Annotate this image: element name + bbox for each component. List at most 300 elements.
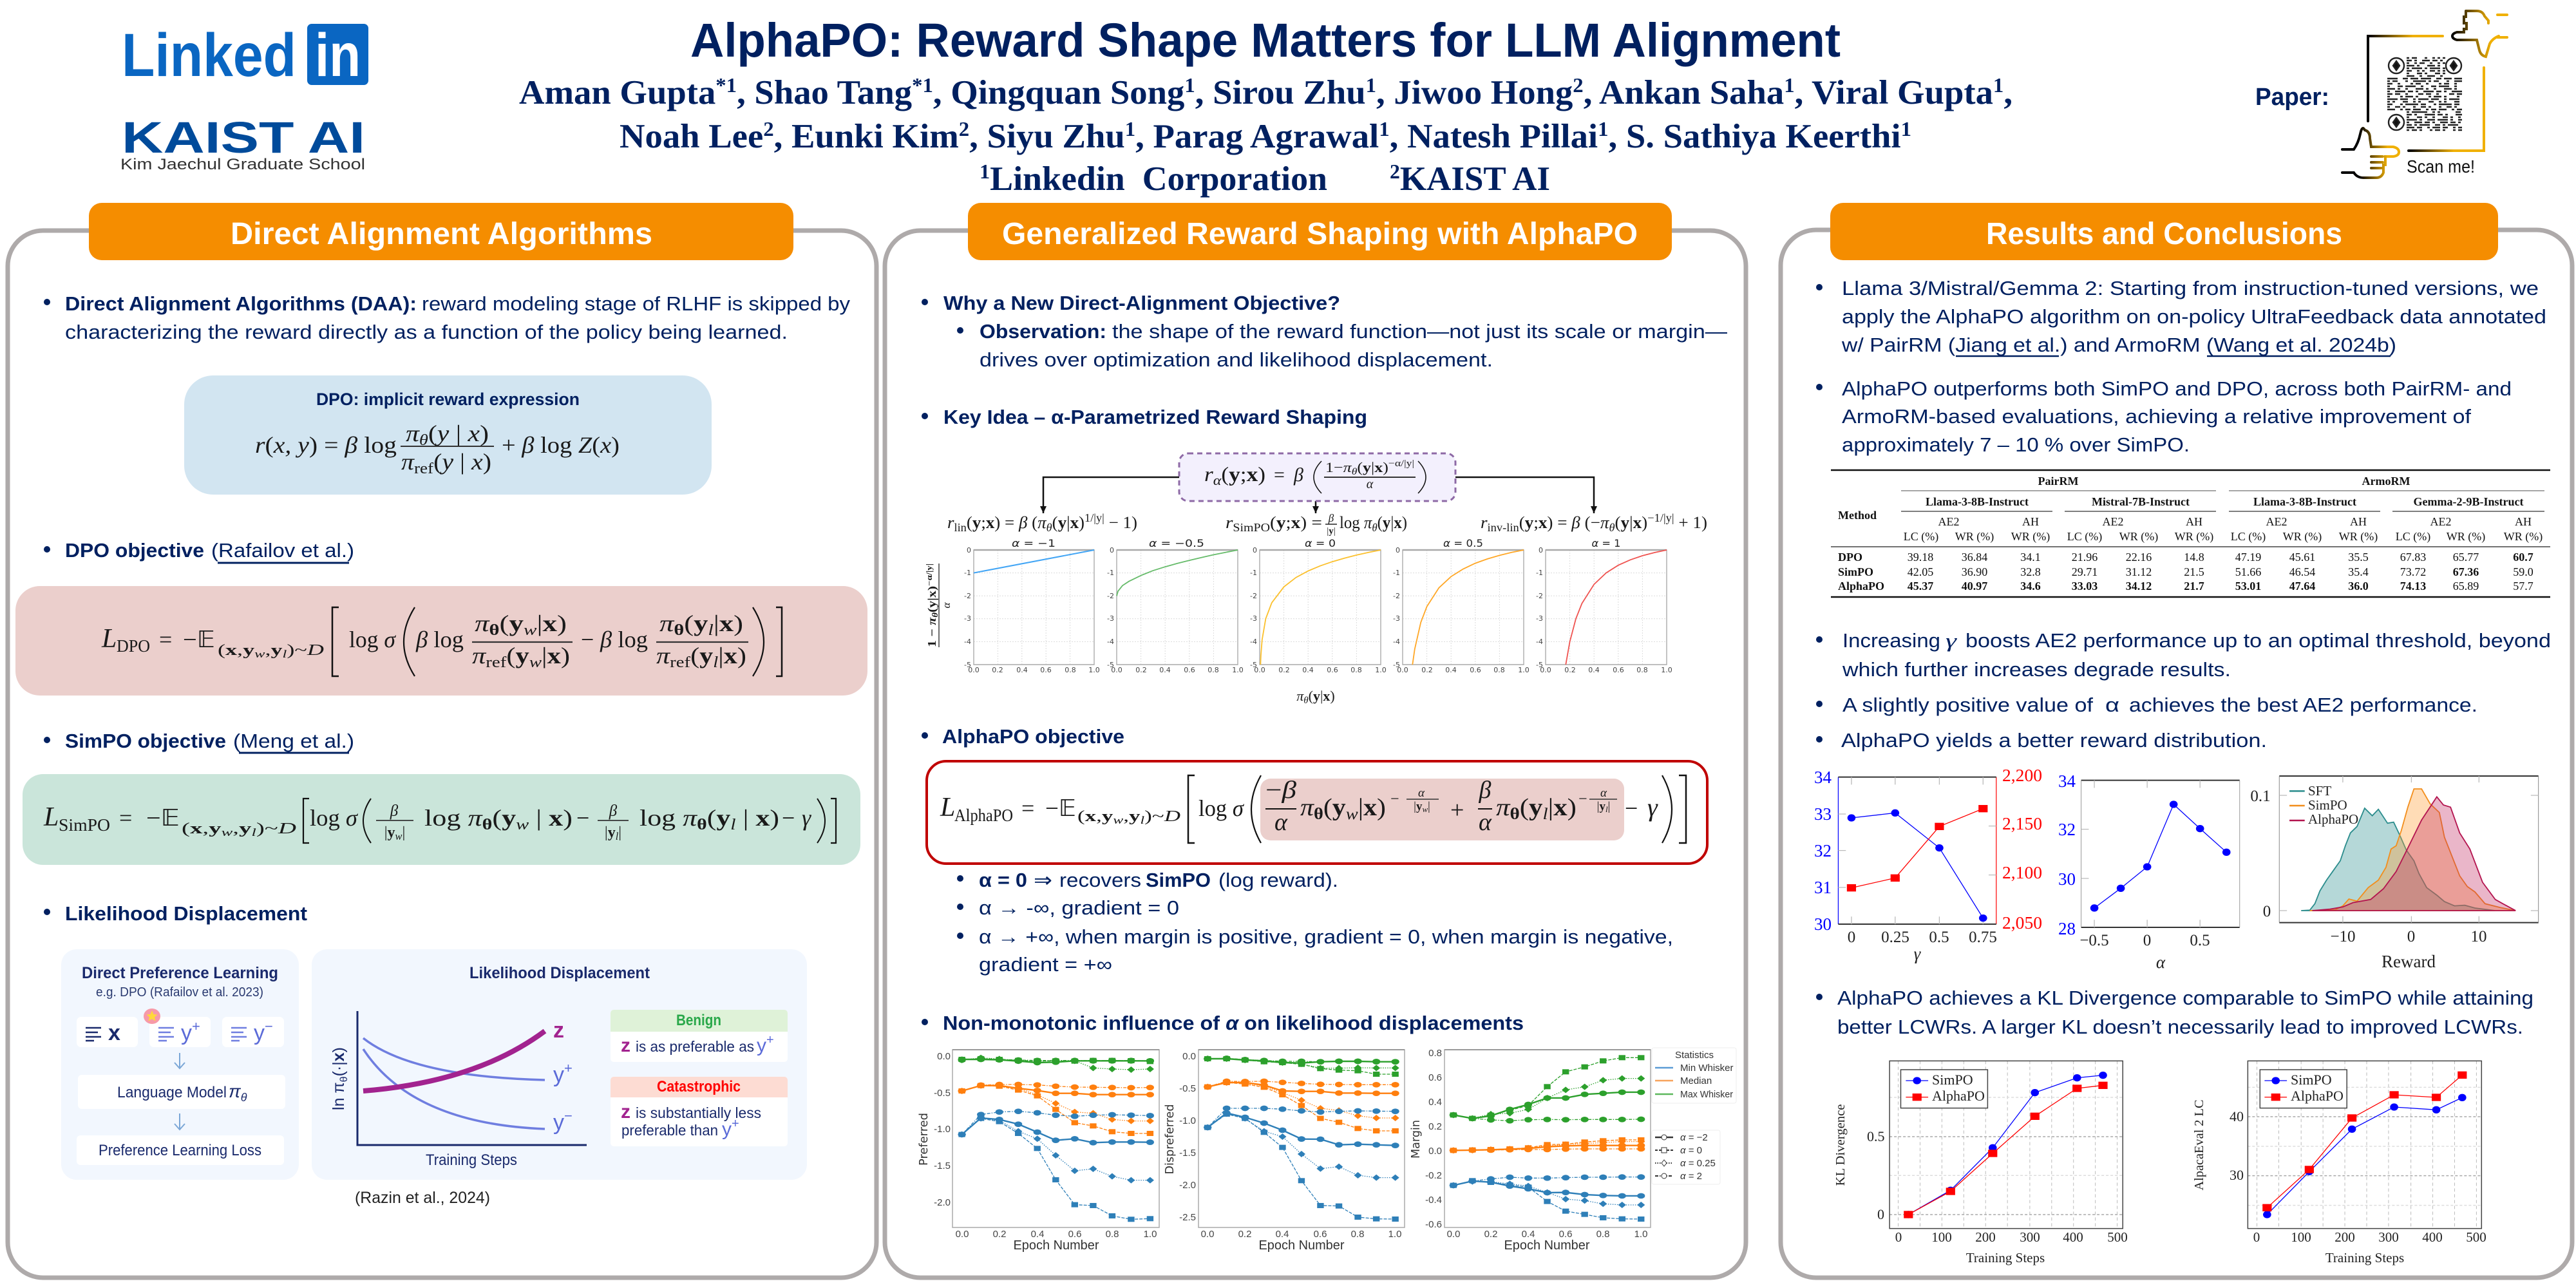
formula: r SimPO: y;x) = [1276, 513, 1320, 532]
panel heading [89, 203, 793, 260]
small plot: alpha 0: -5 [1250, 661, 1257, 669]
chart: KL divergence: Training Steps [1966, 1250, 2045, 1265]
chart: margin: 0.8 [1596, 1229, 1609, 1240]
results table: 31.12 [2126, 565, 2152, 578]
small plot: alpha 1: -1 [1536, 569, 1543, 577]
chart: KL divergence: 0.5 [1867, 1128, 1884, 1144]
formula: AlphaPO loss: π [1300, 794, 1314, 821]
formula: r lin: lin [954, 521, 967, 534]
formula: AlphaPO loss: + [1450, 797, 1464, 824]
chart: AlpacaEval 2 LC: 30 [2230, 1167, 2244, 1183]
results table: 60.7 [2513, 551, 2533, 564]
small plot: alpha 0: -3 [1250, 614, 1257, 623]
small plot: alpha 0.5: -2 [1393, 592, 1400, 600]
chart: gamma sweep: 2,200 [2002, 766, 2042, 785]
text: gamma and alpha findings: γ [1946, 630, 1957, 652]
box: language model: θ [241, 1091, 247, 1104]
formula: r inv-lin: inv-lin [1488, 521, 1519, 534]
y axis label: ( [925, 608, 939, 612]
authors: , Parag Agrawal [1135, 118, 1379, 155]
text: AlphaPO outperforms: approximately 7 – 10 % over SimPO. [1842, 434, 2190, 456]
formula: DPO loss: y [516, 643, 529, 668]
text: why a new objective: Why a New Direct-Alignment Objective? [943, 292, 1340, 314]
chart: reward distribution: Reward [2382, 952, 2436, 971]
formula: alpha reward: = [1274, 464, 1285, 486]
logo: KAIST AI: KAIST AI [122, 113, 365, 162]
formula: DPO loss: DPO [117, 636, 150, 656]
results table: 74.13 [2400, 580, 2426, 592]
formula: AlphaPO loss: − [1625, 795, 1638, 821]
affiliations: Linkedin Corporation [990, 160, 1327, 198]
small plot: alpha 0: 1.0 [1375, 666, 1387, 674]
small plot: alpha -1: -3 [964, 614, 971, 623]
small plot: alpha 1: 1.0 [1661, 666, 1672, 674]
chart: margin: 0.0 [1447, 1229, 1460, 1240]
legend: statistics: Statistics [1675, 1050, 1714, 1061]
x axis label: ( [1309, 688, 1313, 704]
chart: preferred: -2.0 [934, 1197, 951, 1208]
chart: alpha sweep: 32 [2058, 820, 2076, 839]
callout: DPO implicit reward expression: y | x) [437, 421, 488, 446]
chart: margin: -0.4 [1425, 1195, 1442, 1206]
text: AlphaPO outperforms: ArmoRM-based evaluations, achieving a relative improvement of [1842, 406, 2472, 428]
chart: gamma sweep: 33 [1814, 804, 1832, 824]
results table: 59.0 [2513, 565, 2533, 578]
small plot: alpha 0.5: 0.6 [1470, 666, 1481, 674]
small plot: alpha 1: α = 1 [1592, 537, 1620, 549]
formula: DPO loss: l [708, 621, 714, 639]
chart: dispreferred: Dispreferred [1163, 1104, 1177, 1175]
formula: AlphaPO loss: ( [1520, 794, 1529, 821]
text: gamma and alpha findings [1816, 630, 2551, 752]
formula: SimPO loss: | [529, 805, 549, 831]
formula: DPO loss: w [254, 648, 265, 660]
results table: 67.36 [2453, 565, 2479, 578]
text: gamma and alpha findings: Increasing [1842, 630, 1940, 652]
formula: DPO loss: − [581, 627, 594, 652]
formula: SimPO loss: θ [697, 816, 707, 833]
formula: SimPO loss: w [395, 830, 402, 842]
logo: KAIST AI [120, 113, 365, 173]
arrow down [175, 1113, 185, 1130]
formula: AlphaPO loss: π [1496, 794, 1511, 821]
results table: LC (%) [2231, 530, 2266, 544]
results table: 33.03 [2072, 580, 2098, 592]
formula: r lin: − 1) [1104, 513, 1137, 532]
formula: DPO loss: w [529, 654, 542, 671]
authors: *1 [715, 74, 737, 97]
formula: AlphaPO loss: θ [1510, 804, 1520, 823]
results table: LC (%) [2396, 530, 2430, 544]
results table: 36.90 [1962, 565, 1987, 578]
small plot: alpha -0.5: 0.4 [1159, 666, 1171, 674]
authors: 1 [1184, 74, 1195, 97]
formula: SimPO loss: θ [482, 816, 492, 833]
small plot: alpha 0.5: 0.4 [1445, 666, 1457, 674]
results table: AE2 [2266, 515, 2287, 528]
formula: DPO loss: l [283, 648, 287, 660]
diagram: likelihood displacement chart: Training Steps [426, 1151, 517, 1169]
results table: 39.18 [1908, 551, 1933, 564]
text: AlphaPO outperforms: AlphaPO outperforms both SimPO and DPO, across both PairRM- and [1842, 378, 2512, 400]
chart: reward distribution: 0 [2263, 903, 2271, 920]
card: benign [611, 1010, 788, 1062]
formula: SimPO loss: log π [424, 805, 480, 831]
results table: 21.96 [2072, 551, 2098, 564]
authors: 2 [763, 118, 774, 140]
formula: DPO loss: π [656, 643, 670, 668]
logo: LinkedIn: Linked [122, 21, 296, 90]
chart: dispreferred: 0.0 [1182, 1051, 1196, 1062]
formula: SimPO loss: | [736, 805, 755, 831]
formula: r SimPO: y|x) [1383, 513, 1407, 532]
chart: margin: 0.4 [1428, 1097, 1442, 1108]
formula: r inv-lin: + 1) [1674, 513, 1707, 532]
small plot: alpha -0.5: 0.8 [1208, 666, 1219, 674]
formula: AlphaPO loss: l [1605, 804, 1608, 814]
x axis label: y|x) [1313, 688, 1335, 704]
results table: 51.66 [2235, 565, 2261, 578]
results table: AH [2515, 515, 2532, 528]
formula: AlphaPO loss: | [1548, 794, 1553, 821]
legend: alpha values: α = −2 [1680, 1132, 1708, 1143]
authors: , Siyu Zhu [969, 118, 1125, 155]
formula: AlphaPO loss: |y [1414, 800, 1422, 813]
formula: AlphaPO loss: α [1418, 786, 1425, 800]
text: why a new objective: the shape of the reward function—not just its scale or margin— [1112, 321, 1728, 343]
formula: SimPO loss: | [618, 824, 621, 841]
chart: AlpacaEval 2 LC: 200 [2334, 1229, 2355, 1245]
chart: AlpacaEval 2 LC: 500 [2466, 1229, 2486, 1245]
small plot: alpha 0: 0.6 [1327, 666, 1338, 674]
results table: LC (%) [2067, 530, 2102, 544]
formula: r lin: ( [1052, 513, 1058, 532]
formula: DPO loss: l [713, 654, 719, 671]
text: gamma and alpha findings: AlphaPO yields a better reward distribution. [1841, 730, 2267, 752]
formula: DPO loss: −𝔼 [183, 627, 215, 652]
authors: , S. Sathiya Keerthi [1609, 118, 1901, 155]
chart: margin: Margin [1409, 1120, 1423, 1159]
legend: alpha values: α = 0.25 [1680, 1158, 1716, 1169]
y axis label: −α/|y| [925, 564, 934, 586]
formula: AlphaPO loss: α [1479, 809, 1492, 836]
chart: dispreferred: Epoch Number [1258, 1238, 1345, 1253]
formula: r SimPO: ( [1270, 513, 1276, 532]
chart: dispreferred: 0.6 [1314, 1229, 1327, 1240]
chart: KL divergence: 200 [1975, 1229, 1996, 1245]
chart: preferred: 0.0 [937, 1051, 951, 1062]
formula: AlphaPO loss: α [1600, 786, 1607, 800]
chart: gamma sweep: 2,150 [2002, 814, 2042, 833]
formula: SimPO loss: x) [549, 805, 571, 831]
formula: alpha reward: −α/|y| [1388, 459, 1414, 469]
diagram: likelihood displacement chart: Likelihood Displacement [469, 964, 650, 982]
chart: gamma sweep: 34 [1814, 768, 1832, 787]
formula: r SimPO [1226, 512, 1407, 536]
chart: AlpacaEval 2 LC: SimPO [2291, 1072, 2332, 1088]
formula: DPO loss: D [306, 642, 324, 659]
results table: AH [2186, 515, 2202, 528]
formula: SimPO loss: (x ,y [182, 820, 216, 837]
small plot: alpha -0.5: 0.6 [1184, 666, 1195, 674]
formula: SimPO loss: − [782, 805, 795, 831]
chart: gamma sweep: 30 [1814, 914, 1832, 934]
formula: SimPO loss: ( [707, 805, 716, 831]
QR code with scan-me frame [2342, 11, 2507, 178]
formula: r inv-lin: ( [1519, 513, 1525, 532]
heading: SimPO objective: (Meng et al.) [233, 730, 354, 752]
formula: SimPO loss: l [730, 816, 736, 833]
box: language model: Language Model [117, 1084, 227, 1101]
formula: AlphaPO loss: θ [1314, 804, 1323, 823]
small plot: alpha 1: 0.8 [1636, 666, 1648, 674]
small plot: alpha -0.5: -3 [1107, 614, 1114, 623]
formula: alpha reward: ( [1357, 459, 1363, 475]
results table: 67.83 [2400, 551, 2426, 564]
formula: AlphaPO loss: w [1113, 814, 1123, 826]
formula: SimPO loss: y [502, 805, 516, 831]
chart: alpha sweep: 28 [2058, 919, 2076, 938]
card: benign: Benign [676, 1012, 721, 1029]
chart: dispreferred [1163, 1050, 1405, 1253]
formula: AlphaPO loss: ( [1323, 794, 1332, 821]
results table: WR (%) [2339, 530, 2378, 544]
card: catastrophic: is substantially less [636, 1104, 761, 1121]
formula: AlphaPO loss: = [1021, 795, 1034, 821]
text: gamma and alpha findings: A slightly positive value of [1842, 694, 2094, 716]
box: preference learning loss [77, 1135, 284, 1165]
results table: 34.6 [2020, 580, 2041, 592]
results table: AE2 [1938, 515, 1959, 528]
formula: DPO loss: y [699, 643, 713, 668]
text: gamma and alpha findings: which further increases degrade results. [1842, 659, 2231, 681]
results table: 40.97 [1962, 580, 1987, 592]
chart: alpha sweep: 0 [2143, 932, 2151, 949]
text: why a new objective [922, 292, 1728, 371]
formula: DPO loss: | [714, 611, 719, 636]
formula: DPO loss: x) [724, 643, 745, 668]
results table: 45.61 [2289, 551, 2315, 564]
box: preference learning loss: Preference Learning Loss [99, 1142, 261, 1159]
panel: results and conclusions [1781, 203, 2572, 1278]
chart: margin: 0.0 [1428, 1146, 1442, 1157]
chart: dispreferred: 0.8 [1351, 1229, 1364, 1240]
text: gamma and alpha findings: achieves the best AE2 performance. [2129, 694, 2477, 716]
formula: SimPO loss: |y [605, 824, 616, 841]
box: language model: π [229, 1081, 241, 1101]
formula: AlphaPO loss: AlphaPO [954, 806, 1013, 825]
logo: KAIST AI: Kim Jaechul Graduate School [120, 156, 365, 173]
text: KL divergence finding [1816, 987, 2533, 1038]
text: limits of alpha: recovers [1059, 869, 1141, 891]
chart: KL divergence: 0 [1877, 1206, 1884, 1222]
heading: key idea: Key Idea – α-Parametrized Reward Shaping [943, 406, 1367, 428]
results table: 42.05 [1908, 565, 1933, 578]
results table: 53.01 [2235, 580, 2261, 592]
card: catastrophic: Catastrophic [657, 1078, 741, 1095]
formula: AlphaPO loss: −𝔼 [1045, 795, 1076, 821]
small plot: alpha -1: α = −1 [1012, 537, 1056, 549]
formula: DPO loss: ( [500, 611, 509, 636]
small plot: alpha -0.5: -5 [1107, 661, 1114, 669]
formula: DPO loss [15, 586, 867, 696]
card: catastrophic: y [722, 1119, 732, 1140]
chart: preferred: Epoch Number [1014, 1238, 1099, 1253]
authors: , Jiwoo Hong [1376, 74, 1573, 111]
authors [519, 74, 2012, 155]
citation: (Razin et al., 2024) [355, 1189, 490, 1207]
formula: SimPO loss: log σ [310, 805, 358, 831]
text: limits of alpha: α → -∞, gradient = 0 [979, 897, 1179, 919]
formula: DPO loss: π [659, 611, 675, 636]
formula: DPO loss: , [265, 642, 271, 659]
results table: 36.84 [1962, 551, 1987, 564]
formula: DPO loss: ref [670, 654, 691, 671]
formula: r inv-lin: y|x) [1621, 513, 1647, 532]
chart: gamma sweep: 31 [1814, 878, 1832, 897]
formula: DPO loss: θ [489, 621, 500, 639]
results table: WR (%) [2175, 530, 2213, 544]
heading: SimPO objective: SimPO objective [65, 730, 226, 752]
chart: margin: 0.6 [1559, 1229, 1572, 1240]
formula: AlphaPO loss: log σ [1198, 795, 1244, 821]
formula: AlphaPO loss: w [1346, 804, 1359, 823]
results table: Mistral-7B-Instruct [2092, 495, 2190, 508]
results table: 45.37 [1908, 580, 1933, 592]
small plot: alpha 0: 0.0 [1254, 666, 1265, 674]
authors: 1 [1379, 118, 1390, 140]
small plot: alpha -0.5: 0.0 [1111, 666, 1122, 674]
authors: 1 [1598, 118, 1609, 140]
results table: WR (%) [2504, 530, 2543, 544]
formula: AlphaPO loss: β [1479, 777, 1492, 804]
chart: AlpacaEval 2 LC: 400 [2422, 1229, 2443, 1245]
input card y minus [222, 1017, 284, 1047]
results table: Method [1838, 509, 1877, 522]
chart: dispreferred: 0.4 [1276, 1229, 1289, 1240]
formula: AlphaPO loss: l [1141, 814, 1145, 826]
small plot: alpha 1: -5 [1536, 661, 1543, 669]
legend: statistics: Max Whisker [1680, 1089, 1733, 1100]
panel heading: Generalized Reward Shaping with AlphaPO [1002, 217, 1638, 251]
formula: AlphaPO loss: y [1129, 808, 1141, 825]
results table: 29.71 [2072, 565, 2098, 578]
panel heading [968, 203, 1672, 260]
text: experiment setup: apply the AlphaPO algorithm on on-policy UltraFeedback data annotated [1842, 306, 2546, 328]
chart: preferred: 0.8 [1106, 1229, 1119, 1240]
formula: r inv-lin: θ [1609, 521, 1615, 534]
small plot: alpha 0: -4 [1250, 638, 1257, 646]
chart: dispreferred: -2.5 [1179, 1212, 1196, 1223]
y axis label [925, 564, 952, 647]
chart: dispreferred: 0.2 [1238, 1229, 1251, 1240]
input card y plus: + [192, 1018, 200, 1034]
chart: preferred: 1.0 [1144, 1229, 1157, 1240]
diagram: likelihood displacement chart: x) [330, 1047, 348, 1061]
chart: gamma sweep [1814, 766, 2042, 963]
chart: AlpacaEval 2 LC: 0 [2253, 1229, 2260, 1245]
small plot: alpha -0.5 [1107, 537, 1244, 674]
results table: 57.7 [2513, 580, 2533, 592]
chart: preferred: 0.2 [993, 1229, 1006, 1240]
formula: alpha reward: θ [1352, 467, 1357, 477]
chart: gamma sweep: 2,100 [2002, 863, 2042, 882]
callout: DPO implicit reward expression: r(x, y) = β log [255, 432, 397, 458]
logo: LinkedIn: in [315, 21, 361, 90]
chart: gamma sweep: 0.5 [1929, 929, 1949, 946]
chart: margin: -0.2 [1425, 1170, 1442, 1181]
formula: DPO loss: ( [684, 611, 694, 636]
formula: DPO loss: | [536, 611, 542, 636]
chart: AlpacaEval 2 LC: AlphaPO [2291, 1088, 2344, 1104]
authors: 1 [1784, 74, 1795, 97]
small plot: alpha 0: α = 0 [1305, 537, 1336, 549]
QR code with scan-me frame: Scan me! [2407, 156, 2475, 176]
authors: , Viral Gupta [1795, 74, 1993, 111]
formula: SimPO loss: x) [755, 805, 777, 831]
formula: AlphaPO loss: )~ [1144, 808, 1164, 825]
small plot: alpha -1: 0.4 [1016, 666, 1028, 674]
small plot: alpha 0.5: -5 [1393, 661, 1400, 669]
text: experiment setup: w/ PairRM (Jiang et al.) and ArmoRM (Wang et al. 2024b) [1841, 334, 2396, 356]
formula: DPO loss: y [694, 611, 708, 636]
results table: 46.54 [2289, 565, 2315, 578]
formula: AlphaPO loss: − [1578, 791, 1587, 808]
formula: r lin: y;x) = β (π [972, 513, 1046, 532]
small plot: alpha -1: 0.2 [992, 666, 1003, 674]
small plot: alpha 0.5 [1393, 537, 1530, 674]
formula: DPO loss: L [101, 624, 117, 654]
formula: SimPO loss: SimPO [59, 815, 110, 835]
chart: preferred: -1.5 [934, 1160, 951, 1171]
chart: gamma sweep: γ [1914, 944, 1922, 963]
chart: margin: Epoch Number [1504, 1238, 1590, 1253]
formula: alpha reward: α [1367, 477, 1374, 491]
chart: margin: -0.6 [1425, 1219, 1442, 1230]
small plot: alpha -0.5: -1 [1107, 569, 1114, 577]
small plot: alpha 1: 0.6 [1613, 666, 1624, 674]
small plot: alpha 1: -4 [1536, 638, 1543, 646]
formula: SimPO loss: log π [639, 805, 694, 831]
small plot: alpha 0: 0 [1253, 546, 1257, 554]
results table: AE2 [2102, 515, 2124, 528]
callout: DPO implicit reward expression: DPO: implicit reward expression [316, 390, 580, 409]
chart: dispreferred: -1.5 [1179, 1148, 1196, 1159]
formula: alpha reward: β [1293, 464, 1303, 486]
chart: gamma sweep: 32 [1814, 841, 1832, 860]
small plot: alpha 1 [1536, 537, 1672, 674]
panel: direct alignment algorithms [8, 203, 876, 1278]
diagram: likelihood displacement chart [312, 949, 807, 1180]
input card x: x [108, 1021, 120, 1045]
formula: AlphaPO loss: − [1390, 791, 1399, 808]
formula: DPO loss: β log [415, 627, 464, 652]
formula: AlphaPO loss: y [1332, 794, 1346, 821]
formula: DPO loss: y [509, 611, 524, 636]
chart: margin [1409, 1048, 1651, 1253]
authors: , Sirou Zhu [1195, 74, 1366, 111]
text: limits of alpha: gradient = +∞ [979, 954, 1112, 976]
text: DAA definition: characterizing the reward directly as a function of the policy being learned. [65, 321, 788, 343]
card: catastrophic: preferable than [621, 1122, 718, 1139]
formula: AlphaPO loss: w [1422, 804, 1428, 814]
chart: alpha sweep: 34 [2058, 772, 2076, 791]
chart: reward distribution [2250, 776, 2539, 971]
callout: DPO implicit reward expression: π [406, 421, 420, 446]
chart: KL divergence: 0 [1895, 1229, 1902, 1245]
small plot: alpha -1: 1.0 [1088, 666, 1100, 674]
heading: non-monotonic influence: Non-monotonic influence of α on likelihood displacements [943, 1012, 1524, 1034]
